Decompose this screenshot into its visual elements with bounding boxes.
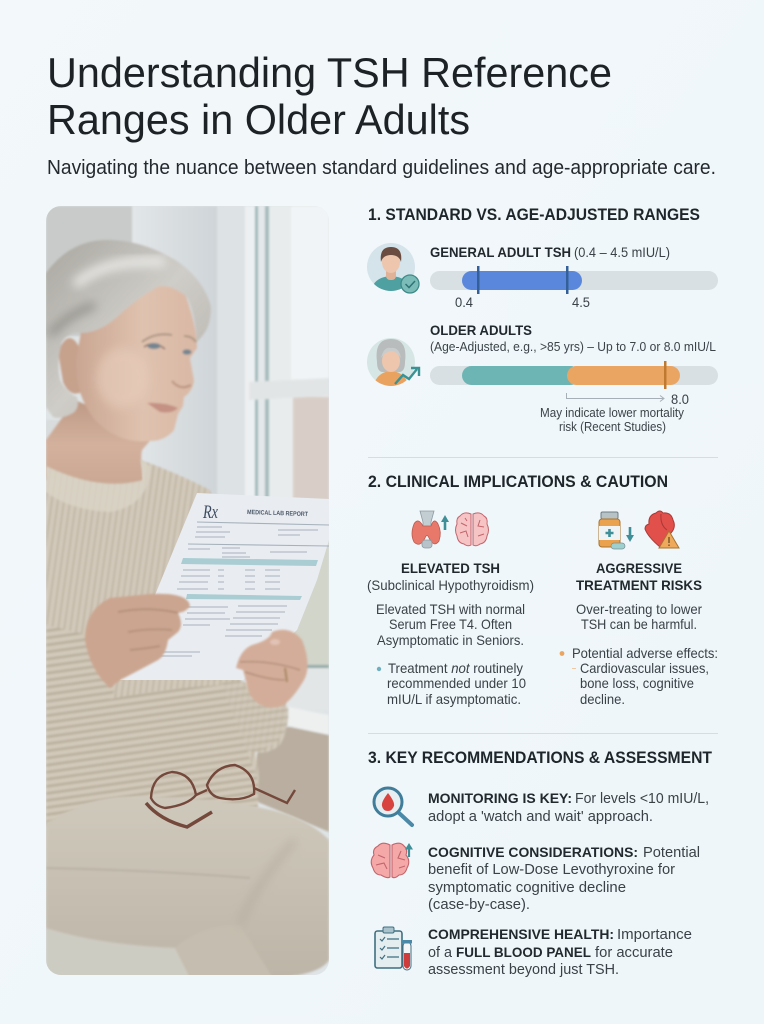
text: comprehensive health: FULL BLOOD PANEL (456, 944, 591, 960)
note: lower mortality risk: risk (Recent Studies) (559, 420, 666, 434)
label: older adults: (Age-Adjusted, e.g., >85 yrs) – Up to 7.0 or 8.0 mIU/L (430, 340, 716, 354)
photo: older woman reading a lab report by a window (46, 206, 329, 980)
lab report paper: MEDICAL LAB REPORT (247, 509, 308, 518)
icon: brain with up arrow (371, 843, 413, 878)
icon: pill bottle with down arrow (599, 512, 634, 549)
label: older adults: OLDER ADULTS (430, 322, 532, 338)
text: comprehensive health: of a (428, 945, 453, 961)
hands (85, 594, 308, 708)
section 1 heading: 1. STANDARD VS. AGE-ADJUSTED RANGES (368, 206, 700, 224)
panel: aggressive treatment risks: decline. (580, 692, 625, 707)
icon: brain (456, 513, 488, 546)
ear (58, 338, 83, 394)
section 2 heading: 2. CLINICAL IMPLICATIONS & CAUTION (368, 473, 668, 491)
text: monitoring is key: For levels <10 mIU/L, (575, 791, 709, 807)
icon: adult with check badge (367, 243, 419, 293)
panel: elevated TSH: (Subclinical Hypothyroidism) (367, 578, 534, 593)
range bar: older adults (430, 361, 718, 389)
lips (147, 403, 178, 412)
section 3: key recommendations and assessment (368, 749, 712, 978)
neck (46, 400, 150, 485)
text: cognitive considerations: COGNITIVE CONSIDERATIONS: (428, 844, 638, 860)
panel: aggressive treatment risks (560, 560, 718, 707)
panel: elevated TSH: Treatment not routinely (388, 661, 523, 676)
panel: elevated TSH: ELEVATED TSH (401, 560, 500, 576)
text: monitoring is key: adopt a 'watch and wait' approach. (428, 809, 653, 825)
panel: aggressive treatment risks: Over-treating to lower (576, 602, 702, 617)
note: lower mortality risk: May indicate lower mortality (540, 406, 685, 420)
label: general adult TSH: GENERAL ADULT TSH (430, 244, 571, 260)
text: cognitive considerations: benefit of Low-Dose Levothyroxine for (428, 862, 675, 878)
eyes and brows (142, 334, 172, 342)
title (47, 49, 612, 143)
icon: clipboard with test tube (375, 927, 412, 970)
pants and cushion (46, 797, 329, 980)
panel: aggressive treatment risks: AGGRESSIVE (596, 560, 682, 576)
subtitle: Navigating the nuance between standard guidelines and age-appropriate care. (47, 157, 716, 179)
panel: aggressive treatment risks: bone loss, cognitive (580, 676, 694, 691)
text: comprehensive health (428, 926, 692, 978)
panel: aggressive treatment risks: TSH can be harmful. (581, 617, 697, 632)
text: cognitive considerations (428, 844, 700, 913)
range bar: general adult: 0.4 (455, 295, 473, 310)
lab report paper: Rx (202, 502, 218, 523)
section 2: clinical implications and caution (367, 473, 718, 707)
sweater (46, 460, 288, 826)
text: comprehensive health: for accurate (595, 945, 673, 961)
note: lower mortality risk (540, 406, 685, 434)
glasses (146, 765, 295, 827)
icon: older adult with rising arrow (367, 338, 419, 388)
section 1: standard vs age-adjusted ranges (367, 206, 718, 434)
icon: magnifier with blood drop (374, 788, 412, 825)
panel: elevated TSH (367, 560, 534, 707)
panel: aggressive treatment risks: Cardiovascular issues, (580, 661, 709, 676)
arrow: 4.5 to 8.0: 8.0 (671, 392, 689, 407)
range bar: general adult (430, 266, 718, 310)
section 3 heading: 3. KEY RECOMMENDATIONS & ASSESSMENT (368, 749, 712, 767)
panel: elevated TSH: Elevated TSH with normal (376, 602, 525, 617)
lab report paper (120, 493, 329, 680)
icon: heart with warning triangle (645, 511, 679, 548)
panel: elevated TSH: Serum Free T4. Often (389, 617, 512, 632)
panel: elevated TSH: Asymptomatic in Seniors. (377, 633, 524, 648)
text: cognitive considerations: Potential (643, 845, 700, 861)
nose shade (172, 381, 191, 387)
panel: aggressive treatment risks: TREATMENT RISKS (576, 577, 702, 593)
title: Ranges in Older Adults (47, 96, 470, 143)
hair (46, 240, 211, 418)
text: monitoring is key: MONITORING IS KEY: (428, 790, 572, 806)
face (76, 280, 197, 442)
text: cognitive considerations: (case-by-case). (428, 897, 530, 913)
arrow: 4.5 to 8.0 (566, 392, 689, 407)
range bar: general adult: 4.5 (572, 295, 590, 310)
label: general adult TSH: (0.4 – 4.5 mIU/L) (574, 245, 670, 260)
panel: elevated TSH: mIU/L if asymptomatic. (387, 692, 521, 707)
text: comprehensive health: Importance (617, 927, 692, 943)
title: Understanding TSH Reference (47, 49, 612, 96)
label: general adult TSH (430, 244, 670, 260)
panel: elevated TSH: recommended under 10 (387, 676, 526, 691)
text: comprehensive health: COMPREHENSIVE HEALTH: (428, 926, 614, 942)
panel: aggressive treatment risks: Potential adverse effects: (572, 646, 718, 661)
text: monitoring is key (428, 790, 709, 825)
icon: thyroid with up arrow (412, 511, 449, 548)
text: comprehensive health: assessment beyond just TSH. (428, 962, 619, 978)
text: cognitive considerations: symptomatic cognitive decline (428, 880, 626, 896)
label: older adults (430, 322, 716, 354)
